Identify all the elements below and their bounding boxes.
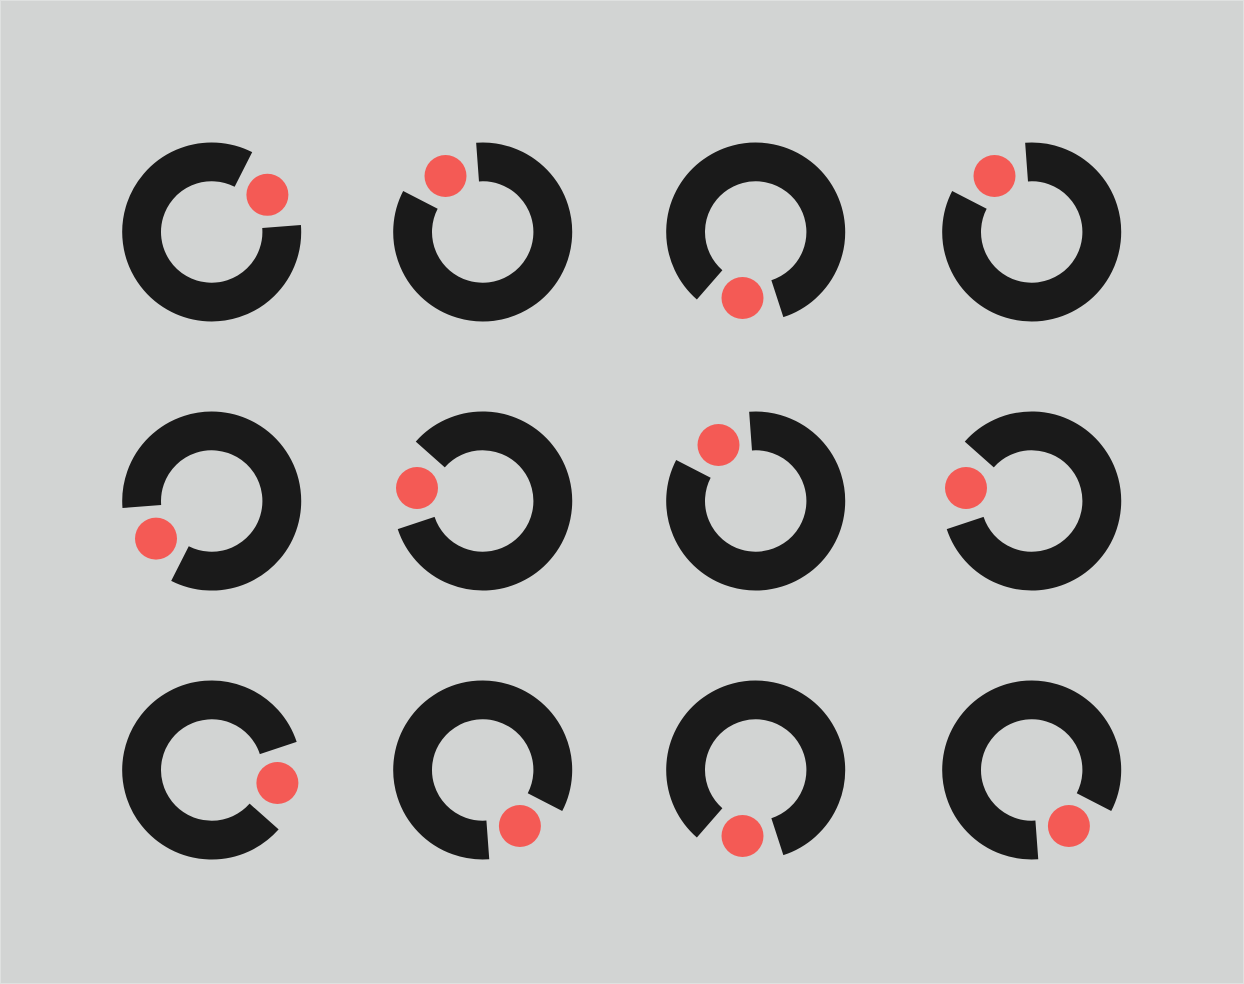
ring 12: row 3 column 4, gap lower right <box>962 700 1102 847</box>
ring 5: row 2 column 1, gap lower left <box>135 431 282 571</box>
ring 1: row 1 column 1, gap upper right <box>142 162 288 302</box>
ring 3: row 1 column 3, gap bottom <box>686 162 826 319</box>
ring 7: row 2 column 3, gap upper left <box>686 424 826 571</box>
ring 6: row 2 column 2, gap left <box>396 431 553 571</box>
ring 2: row 1 column 2, gap upper left <box>413 155 553 302</box>
ring 11: row 3 column 3, gap bottom <box>686 700 826 857</box>
ring 8: row 2 column 4, gap left <box>945 431 1102 571</box>
ring 9: row 3 column 1, gap right <box>142 700 298 840</box>
ring 10: row 3 column 2, gap lower right <box>413 700 553 847</box>
ring 4: row 1 column 4, gap upper left <box>962 155 1102 302</box>
